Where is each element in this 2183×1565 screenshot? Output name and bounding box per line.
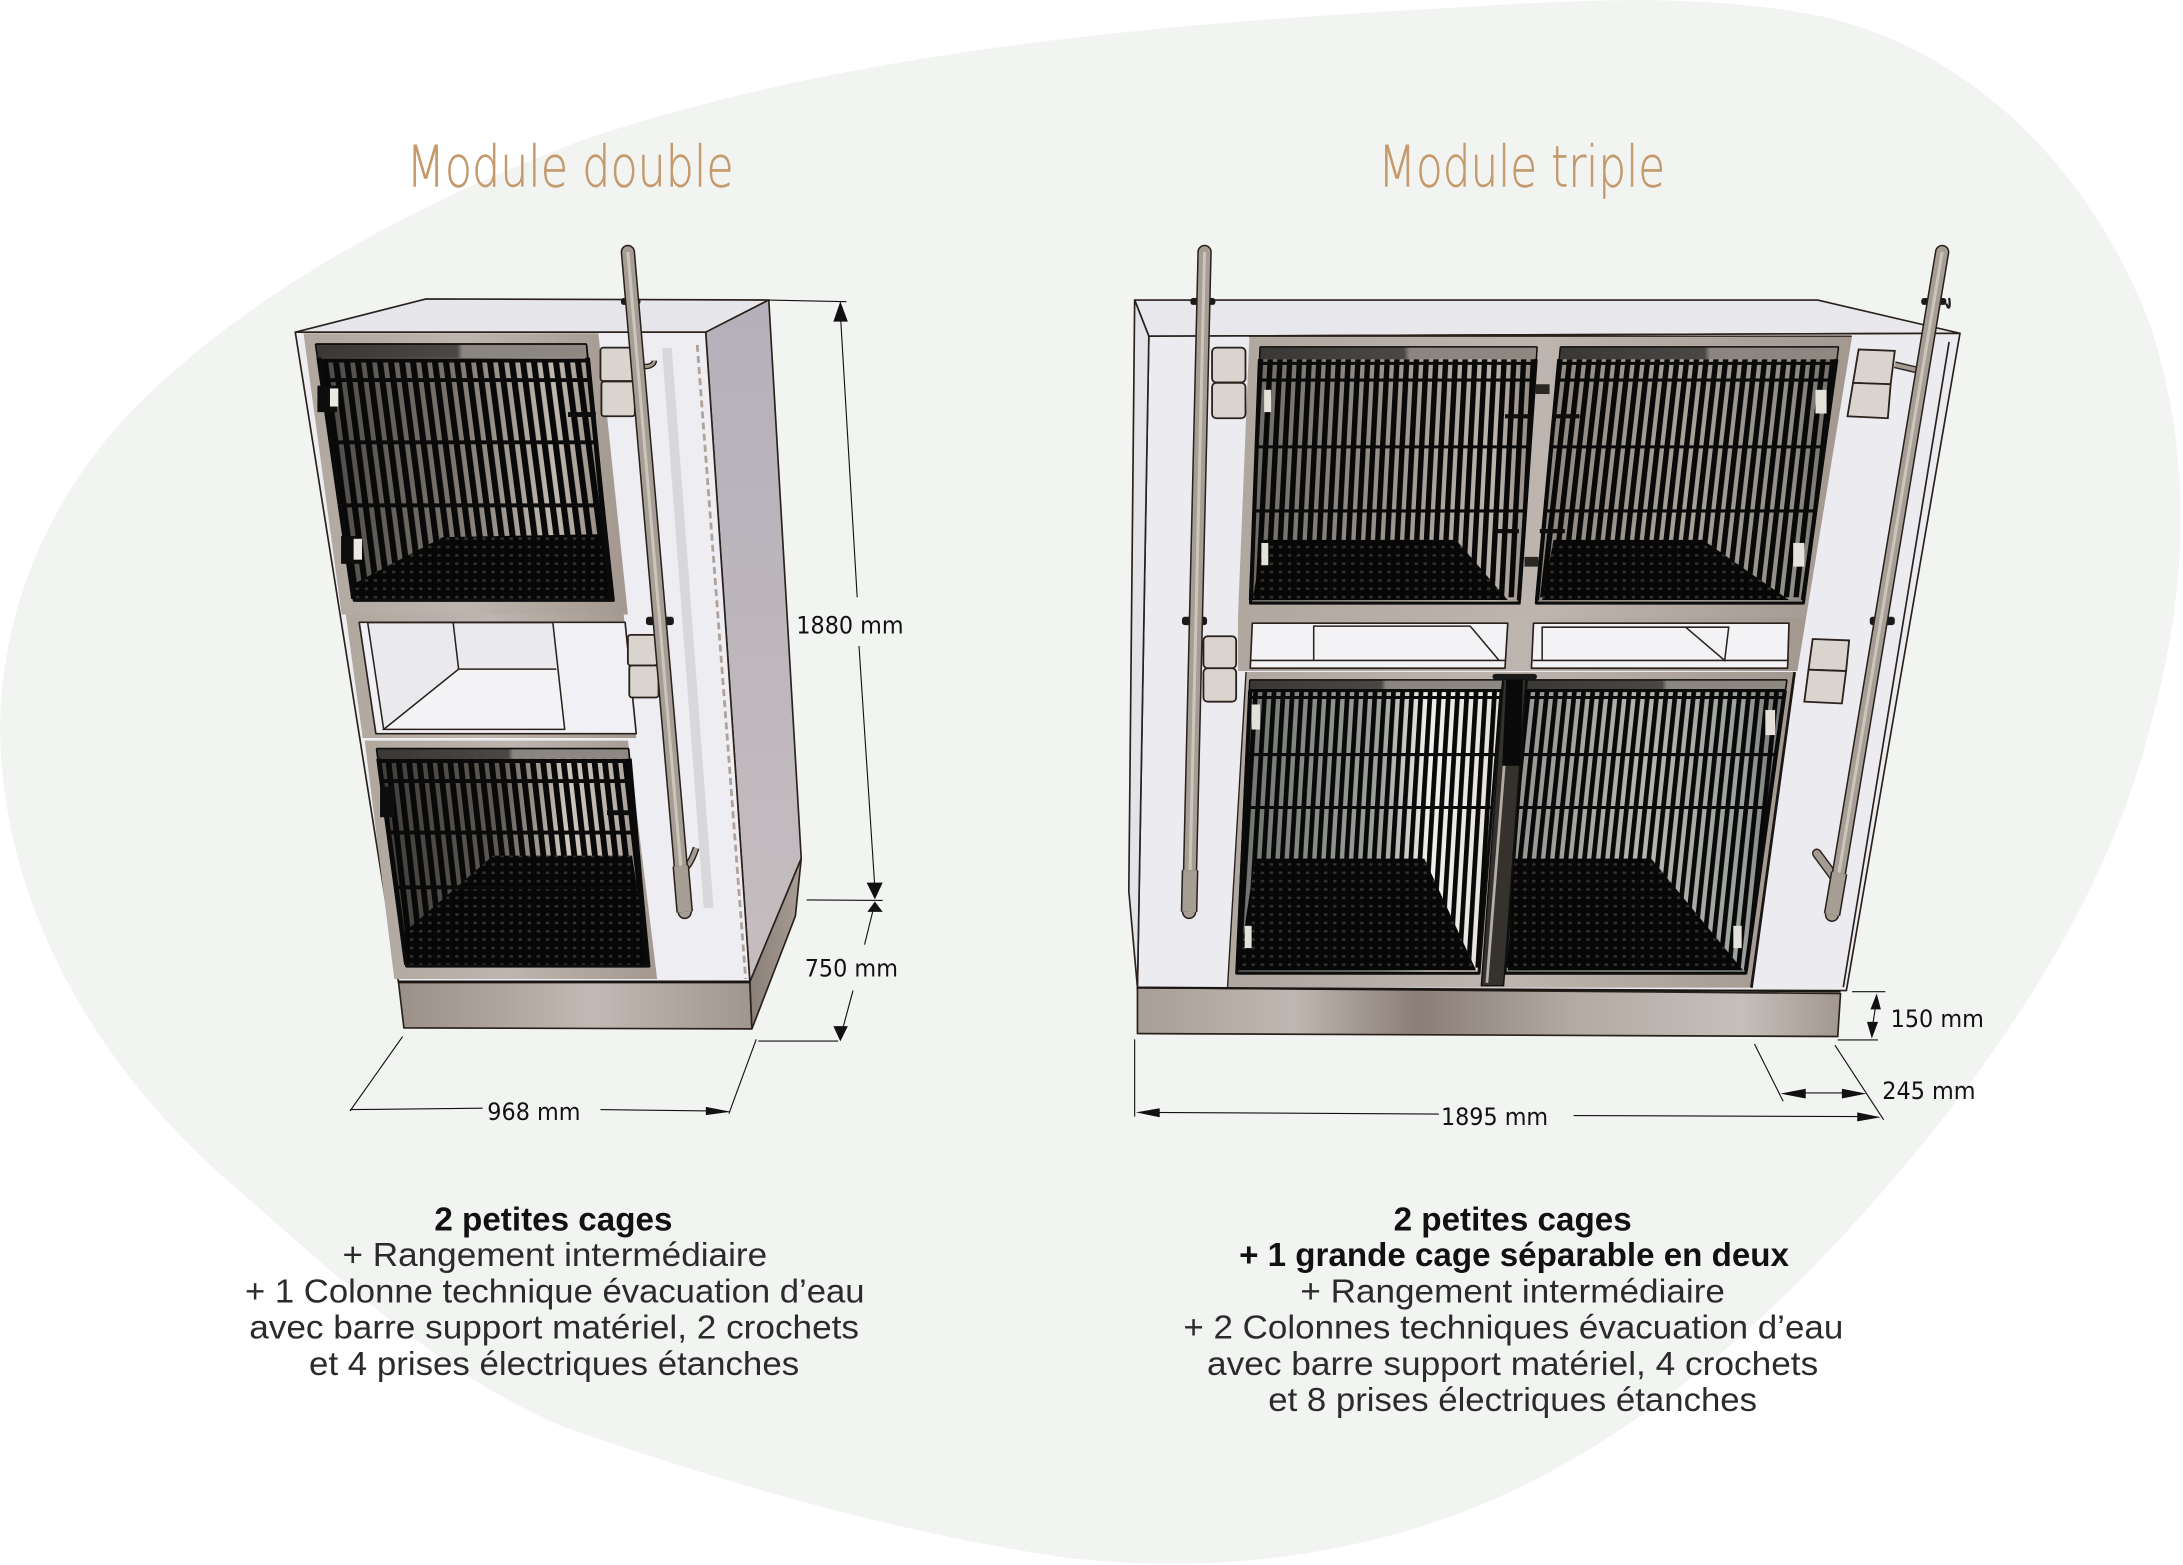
technical column pole <box>621 252 696 912</box>
upper left cage <box>1250 348 1536 603</box>
top face <box>1135 300 1960 336</box>
left technical column pole <box>1182 252 1215 912</box>
dimension: 1895 mm: 1895 mm <box>1441 1103 1548 1131</box>
description: module double: + 1 Colonne technique évacuation d’eau <box>245 1273 865 1310</box>
sockets right upper <box>1847 349 1895 418</box>
centre hinges and latches <box>1497 384 1579 567</box>
title: module triple: Module triple <box>1378 135 1665 201</box>
description: module triple: avec barre support matériel, 4 crochets <box>1207 1346 1818 1383</box>
description: module triple: 2 petites cages <box>1394 1202 1632 1239</box>
description: module double <box>245 1202 865 1383</box>
description: module double: + Rangement intermédiaire <box>342 1237 767 1274</box>
front panel <box>1137 333 1960 991</box>
dimension: 245 mm: 245 mm <box>1882 1077 1976 1105</box>
dimension: 750 mm <box>758 900 898 1041</box>
dashed panel seam <box>697 345 746 979</box>
lower cage <box>377 749 649 966</box>
socket lower <box>628 635 659 698</box>
description: module triple: + 1 grande cage séparable en deux <box>1239 1237 1789 1274</box>
dimension: 968 mm <box>350 1037 756 1126</box>
upper cage <box>316 345 613 600</box>
plinth front <box>398 982 752 1029</box>
title: module double: Module double <box>407 135 734 201</box>
sockets left lower <box>1203 636 1236 702</box>
right technical column pole <box>1817 252 1950 915</box>
module triple cabinet <box>1129 252 1960 1037</box>
sockets right lower <box>1804 639 1849 703</box>
upper cage frame <box>304 333 628 615</box>
central divider and latch <box>1481 674 1537 986</box>
left side strip <box>1129 300 1149 988</box>
left storage opening <box>1250 623 1508 668</box>
description: module double: 2 petites cages <box>434 1202 672 1239</box>
description: module triple: et 8 prises électriques étanches <box>1268 1382 1757 1419</box>
description: module triple <box>1183 1202 1843 1419</box>
sockets left upper <box>1212 348 1245 418</box>
right outer edge <box>1843 342 1949 987</box>
lower left cage <box>1237 681 1502 973</box>
lower cage frame <box>365 741 657 979</box>
middle storage frame <box>346 615 636 738</box>
description: module triple: + Rangement intermédiaire <box>1300 1273 1725 1310</box>
plinth side <box>750 859 801 1029</box>
pole shadow <box>667 348 709 908</box>
description: module double: et 4 prises électriques étanches <box>309 1346 799 1383</box>
description: module triple: + 2 Colonnes techniques évacuation d’eau <box>1183 1310 1843 1347</box>
lower right cage <box>1505 681 1786 973</box>
dimension: 750 mm: 750 mm <box>805 955 898 983</box>
dimension: 1895 mm <box>1135 1039 1881 1131</box>
plinth <box>1137 988 1841 1037</box>
middle storage frame <box>1238 617 1806 671</box>
front panel <box>295 332 750 982</box>
upper right cage <box>1536 348 1838 603</box>
upper frame <box>1238 336 1852 617</box>
dimension: 150 mm: 150 mm <box>1891 1005 1984 1033</box>
top face <box>295 299 769 332</box>
lower frame <box>1228 672 1795 988</box>
dimension: 1880 mm: 1880 mm <box>796 611 904 639</box>
dimension: 968 mm: 968 mm <box>487 1098 581 1126</box>
right storage opening <box>1531 623 1789 668</box>
description: module double: avec barre support matériel, 2 crochets <box>249 1310 859 1347</box>
module double cabinet <box>295 252 801 1029</box>
socket upper <box>600 348 635 416</box>
dimension: 150 mm <box>1838 992 1984 1040</box>
dimension: 1880 mm <box>769 300 904 899</box>
middle storage opening <box>359 622 636 734</box>
right side panel <box>706 300 801 982</box>
dimension: 245 mm <box>1754 1044 1976 1120</box>
